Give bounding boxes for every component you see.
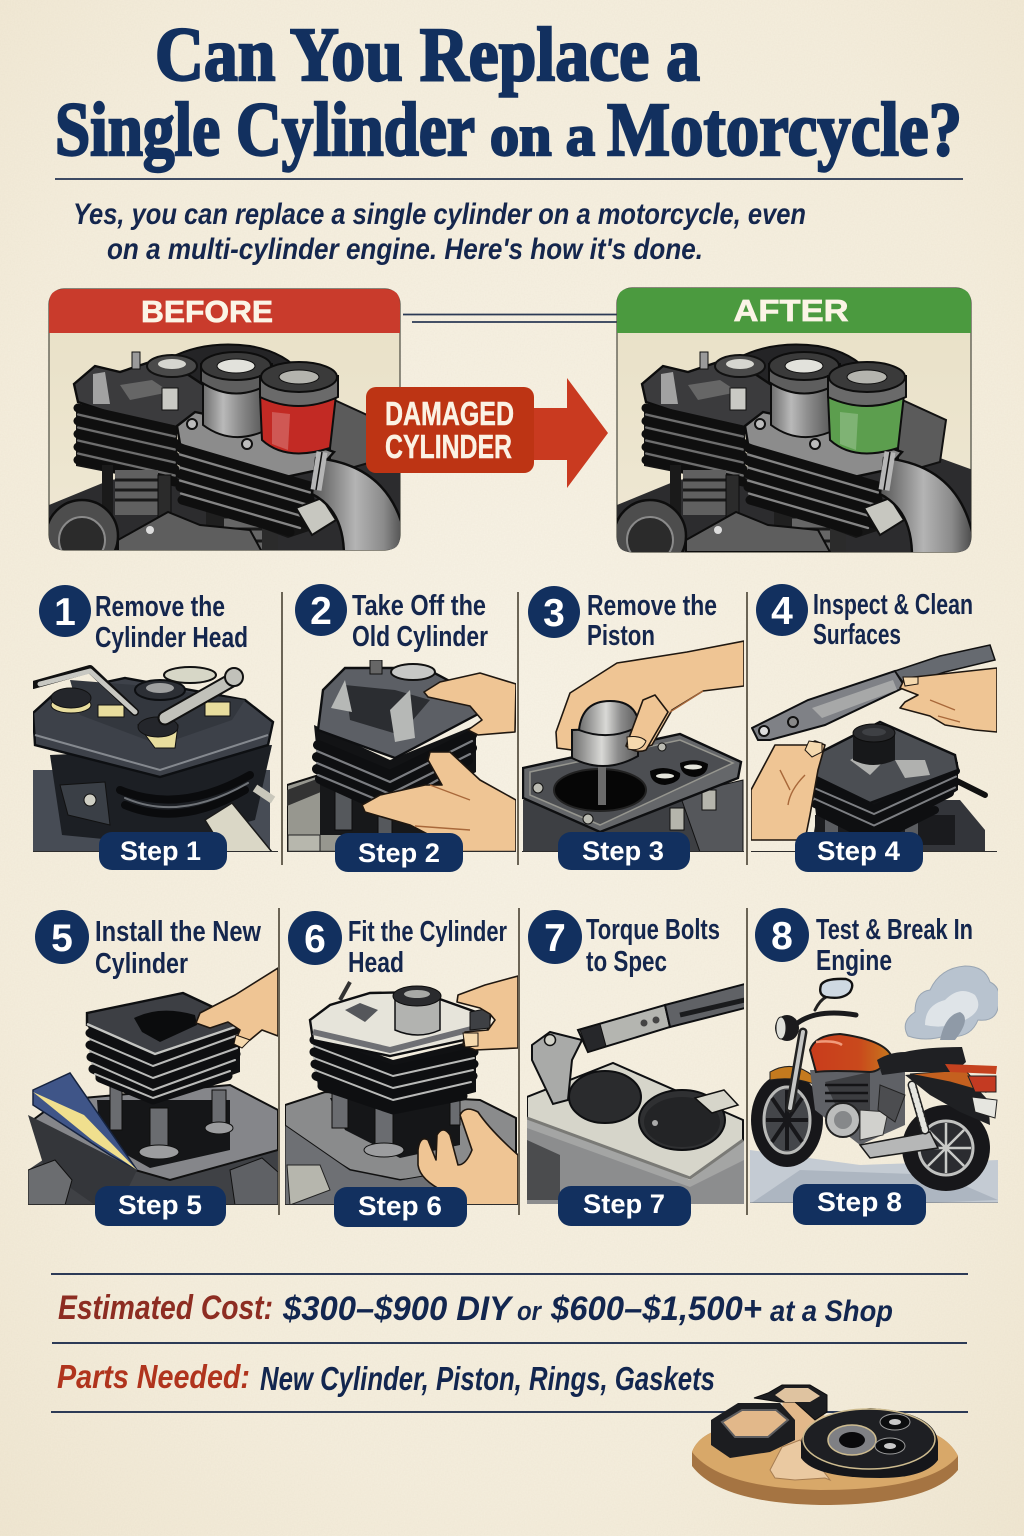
step 8 heading: Engine: [816, 945, 892, 977]
step 3 illustration: removing piston: [522, 641, 744, 852]
intro text: Yes, you can replace a single cylinder on a motorcycle, even: [73, 198, 806, 231]
step 3 number: 3: [543, 592, 565, 635]
step 5 badge: Step 5: [118, 1190, 202, 1220]
step 5 number: [35, 910, 89, 964]
step 4 number: [756, 584, 808, 636]
step 5 heading: Cylinder: [95, 948, 188, 980]
step 5 number: 5: [51, 917, 73, 960]
step 7 heading: to Spec: [586, 946, 667, 978]
step 1 illustration: removing cylinder head: [33, 667, 278, 852]
before header: [49, 289, 400, 333]
callout: damaged cylinder arrow: CYLINDER: [385, 428, 512, 465]
step 4 badge: Step 4: [817, 836, 900, 866]
step 3 number: [528, 586, 580, 638]
step 6 number: [288, 911, 342, 965]
step 5 badge: [95, 1186, 226, 1226]
step 4 number: 4: [771, 590, 793, 633]
parts needed line: Parts Needed:: [57, 1358, 250, 1395]
step 7 number: [528, 910, 582, 964]
step 3 heading: Remove the: [587, 590, 717, 622]
step 2 badge: [335, 833, 463, 872]
step 3 badge: Step 3: [582, 836, 664, 866]
step 8 badge: [793, 1184, 926, 1225]
estimated cost line: $600–$1,500+: [550, 1290, 762, 1328]
step 1 number: 1: [54, 591, 76, 634]
step 5 heading: Install the New: [95, 916, 261, 948]
step 1 panel: [33, 585, 278, 870]
callout: damaged cylinder arrow: [366, 378, 608, 488]
title: Single Cylinder: [55, 88, 475, 172]
title: Motorcycle?: [607, 88, 962, 172]
step 1 heading: Remove the: [95, 591, 225, 623]
step 8 heading: [816, 914, 973, 977]
step 4 panel: [751, 584, 997, 872]
step 1 number: [39, 585, 91, 637]
intro text: on a multi-cylinder engine. Here's how it's done.: [107, 233, 703, 266]
exhaust smoke cloud: [905, 966, 999, 1040]
intro text: [73, 198, 806, 266]
step 2 heading: Old Cylinder: [352, 621, 488, 653]
step 7 heading: [586, 914, 720, 978]
engine with red damaged cylinder: [49, 344, 400, 550]
step 4 badge: [795, 832, 923, 872]
step 1 badge: [99, 832, 227, 870]
step 6 badge: [334, 1187, 467, 1227]
step 5 panel: [28, 910, 278, 1226]
step 2 number: [295, 584, 347, 636]
step 8 number: 8: [771, 915, 793, 958]
step 3 panel: [522, 586, 744, 870]
step 1 heading: Cylinder Head: [95, 622, 248, 654]
step 8 heading: Test & Break In: [816, 914, 973, 946]
step 4 illustration: inspecting surfaces: [751, 645, 997, 852]
step 6 illustration: fitting cylinder head: [285, 976, 518, 1205]
icon: gasket and ring parts on wooden tray: [692, 1385, 958, 1505]
estimated cost line: [58, 1289, 893, 1328]
after header: AFTER: [734, 293, 848, 328]
step 8 badge: Step 8: [817, 1187, 902, 1217]
step 3 heading: [587, 590, 717, 652]
title: [55, 13, 962, 172]
engine with green new cylinder: [617, 344, 971, 552]
step 3 heading: Piston: [587, 620, 655, 652]
step 4 heading: [813, 589, 973, 651]
estimated cost line: Estimated Cost:: [58, 1289, 273, 1327]
step 6 number: 6: [304, 918, 326, 961]
title: Can You Replace a: [155, 13, 700, 97]
parts needed line: [57, 1358, 715, 1397]
estimated cost line: at a Shop: [770, 1295, 893, 1328]
estimated cost line: $300–$900 DIY: [282, 1290, 514, 1328]
step 2 panel: [287, 584, 516, 872]
step 8 illustration: motorcycle with exhaust smoke: [750, 966, 999, 1204]
step 8 panel: [750, 908, 999, 1225]
step 7 illustration: torque wrench on block: [527, 984, 745, 1205]
step 7 badge: Step 7: [583, 1189, 665, 1219]
step 2 heading: [352, 590, 488, 653]
step 3 badge: [558, 832, 690, 870]
step 6 heading: Head: [348, 947, 404, 979]
step 7 heading: Torque Bolts: [586, 914, 720, 946]
panel: before: [46, 289, 408, 572]
estimated cost line: or: [517, 1296, 542, 1326]
step 2 illustration: lifting off old cylinder: [287, 660, 516, 852]
step 2 heading: Take Off the: [352, 590, 486, 622]
step 5 heading: [95, 916, 261, 980]
step 7 badge: [558, 1186, 691, 1226]
panel: after: [614, 288, 976, 572]
step 7 panel: [527, 910, 745, 1226]
step 6 badge: Step 6: [358, 1191, 442, 1221]
step 2 badge: Step 2: [358, 838, 440, 868]
title: on a: [490, 103, 595, 168]
step 6 heading: Fit the Cylinder: [348, 916, 507, 948]
step 5 illustration: installing new cylinder: [28, 968, 278, 1205]
step 2 number: 2: [310, 590, 332, 633]
step 6 heading: [348, 916, 507, 979]
step 6 panel: [285, 911, 518, 1227]
step 1 heading: [95, 591, 248, 654]
before header: BEFORE: [141, 294, 273, 329]
after header: [617, 288, 971, 333]
step 4 heading: Surfaces: [813, 619, 901, 651]
parts needed line: New Cylinder, Piston, Rings, Gaskets: [260, 1360, 715, 1397]
step 8 number: [755, 908, 809, 962]
callout: damaged cylinder arrow: DAMAGED: [385, 395, 514, 432]
step 7 number: 7: [544, 917, 566, 960]
step 1 badge: Step 1: [120, 836, 201, 866]
